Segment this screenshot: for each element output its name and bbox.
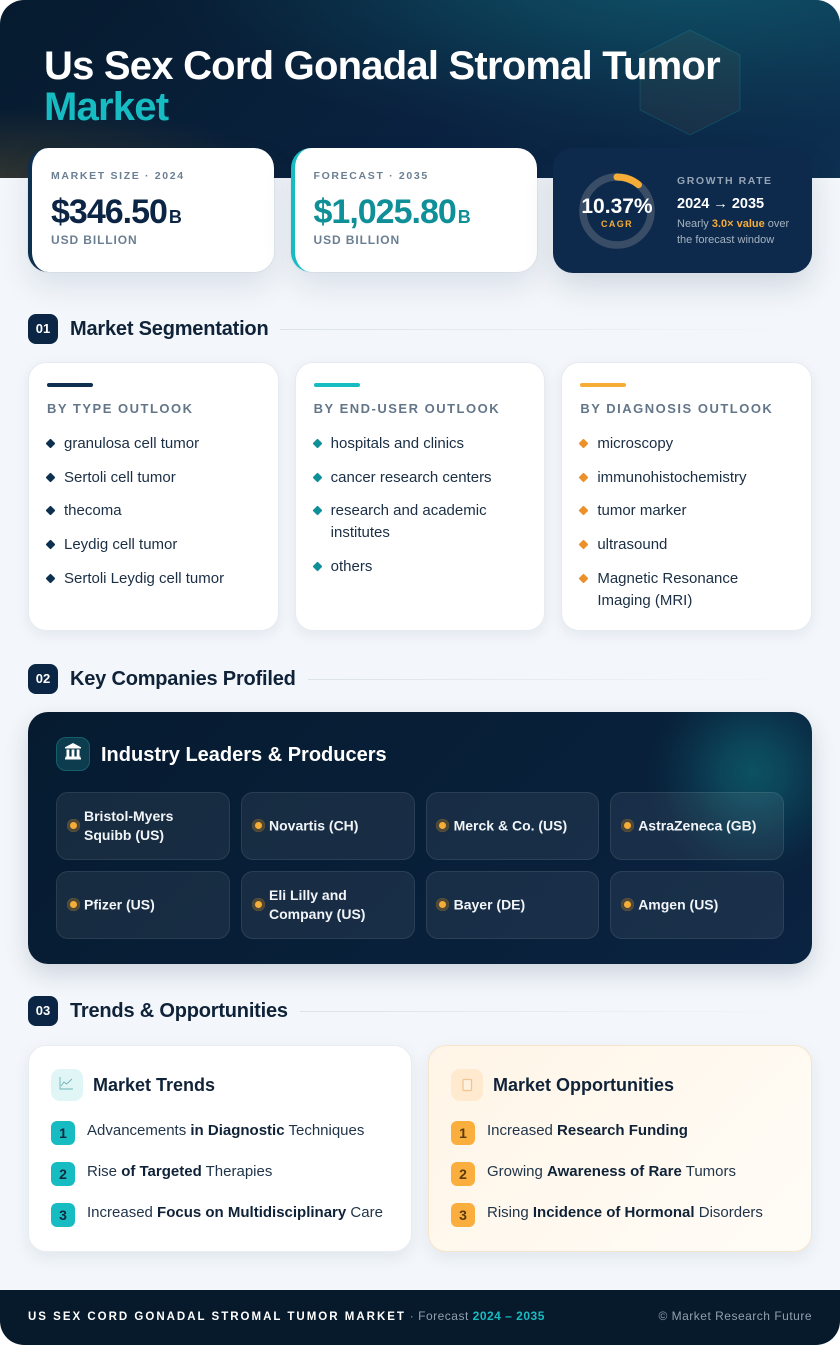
opportunity 3	[451, 1203, 763, 1227]
opportunity 2	[451, 1162, 736, 1186]
growth rate label: GROWTH RATE	[677, 175, 773, 187]
panel: by diagnosis outlook: ultrasound	[597, 536, 667, 553]
company: Bristol-Myers Squibb: Squibb (US)	[84, 827, 164, 843]
company: Bayer: Bayer (DE)	[454, 896, 525, 912]
growth note: the forecast window	[677, 234, 774, 246]
company: Bristol-Myers Squibb	[56, 792, 230, 860]
footer	[0, 1290, 840, 1345]
company: Merck: Merck & Co. (US)	[454, 818, 567, 834]
company: Novartis: Novartis (CH)	[269, 818, 358, 834]
panel: market trends: Advancements in Diagnostic Techniques	[87, 1122, 364, 1139]
stat card: forecast 2035: FORECAST · 2035	[314, 170, 429, 182]
company: Eli Lilly: Company (US)	[269, 906, 365, 922]
panel: by type outlook: Leydig cell tumor	[64, 536, 177, 553]
section heading: trends and opportunities	[28, 996, 640, 1026]
trend 1	[51, 1121, 364, 1145]
stat card: market size 2024: MARKET SIZE · 2024	[51, 170, 185, 182]
section heading: key companies	[28, 664, 644, 694]
company: Amgen	[610, 871, 784, 939]
panel: market opportunities	[428, 1045, 812, 1252]
panel heading: Market Opportunities	[493, 1075, 674, 1095]
panel: by end-user outlook: hospitals and clinics	[331, 435, 464, 452]
section heading: market segmentation: Market Segmentation	[70, 318, 268, 340]
trend 3	[51, 1203, 383, 1227]
panel: by end-user outlook: others	[331, 558, 372, 575]
CAGR value: 10.37%	[581, 195, 653, 218]
company: Amgen: Amgen (US)	[638, 896, 718, 912]
title	[44, 44, 720, 129]
company: Bayer	[426, 871, 599, 939]
company: Eli Lilly: Eli Lilly and	[269, 887, 347, 903]
company: Novartis	[241, 792, 414, 860]
stat card: forecast 2035: USD BILLION	[314, 233, 400, 247]
title: Us Sex Cord Gonadal Stromal Tumor	[44, 44, 720, 88]
stat card: CAGR growth rate	[553, 148, 812, 273]
panel: by end-user outlook: institutes	[331, 524, 390, 541]
panel: market opportunities: Rising Incidence of Hormonal Disorders	[487, 1204, 763, 1221]
header band	[0, 0, 840, 178]
title: Market	[44, 85, 168, 129]
panel: market opportunities: 2	[459, 1166, 467, 1182]
section heading: trends and opportunities: Trends & Opportunities	[70, 1000, 288, 1022]
panel: market opportunities: Increased Research Funding	[487, 1122, 688, 1139]
section heading: market segmentation: 01	[36, 321, 50, 336]
panel: market trends: Rise of Targeted Therapies	[87, 1163, 272, 1180]
footer title: US SEX CORD GONADAL STROMAL TUMOR MARKET · Forecast 2024 – 2035	[28, 1309, 545, 1323]
footer credit: © Market Research Future	[658, 1309, 812, 1323]
panel: market opportunities: 3	[459, 1207, 467, 1223]
stat card: forecast 2035: $1,025.80B	[314, 193, 471, 231]
section heading: market segmentation	[28, 314, 632, 344]
company: Eli Lilly	[241, 871, 414, 939]
panel: by type outlook: BY TYPE OUTLOOK	[47, 401, 194, 416]
company: Pfizer: Pfizer (US)	[84, 896, 155, 912]
panel: market trends: 2	[59, 1166, 67, 1182]
panel: market opportunities: 1	[459, 1125, 467, 1141]
panel: market trends: Increased Focus on Multidisciplinary Care	[87, 1204, 383, 1221]
growth note: Nearly 3.0× value over	[677, 218, 789, 230]
panel: by end-user outlook	[295, 362, 545, 631]
company: AstraZeneca	[610, 792, 784, 860]
panel: by type outlook: Sertoli Leydig cell tumor	[64, 570, 224, 587]
icon: classical building	[56, 737, 90, 771]
trend 2	[51, 1162, 272, 1186]
panel: by end-user outlook: research and academic	[331, 502, 487, 519]
company: Bristol-Myers Squibb: Bristol-Myers	[84, 808, 173, 824]
panel: by diagnosis outlook	[561, 362, 812, 631]
icon: missing glyph box	[451, 1069, 483, 1101]
icon: CAGR progress ring	[579, 173, 655, 249]
growth note	[677, 218, 789, 246]
company: Pfizer	[56, 871, 230, 939]
stat card: market size 2024	[28, 148, 274, 272]
panel: industry leaders	[28, 712, 812, 964]
panel: by diagnosis outlook: BY DIAGNOSIS OUTLOOK	[580, 401, 773, 416]
stat card: market size 2024: USD BILLION	[51, 233, 138, 247]
panel: by end-user outlook: BY END-USER OUTLOOK	[314, 401, 500, 416]
panel: by diagnosis outlook: Imaging (MRI)	[597, 592, 692, 609]
panel: market trends: 3	[59, 1207, 67, 1223]
panel: by diagnosis outlook: microscopy	[597, 435, 673, 452]
stat card: market size 2024: $346.50B	[51, 193, 182, 231]
company: AstraZeneca: AstraZeneca (GB)	[638, 818, 756, 834]
company: Merck	[426, 792, 599, 860]
panel: by diagnosis outlook: tumor marker	[597, 502, 687, 519]
panel heading: Market Trends	[93, 1075, 215, 1095]
stat card: forecast 2035	[290, 148, 536, 272]
section heading: trends and opportunities: 03	[36, 1003, 50, 1018]
panel: by type outlook: granulosa cell tumor	[64, 435, 199, 452]
opportunity 1	[451, 1121, 688, 1145]
icon: line chart	[51, 1069, 83, 1101]
panel heading: Industry Leaders & Producers	[101, 744, 387, 766]
panel: market trends	[28, 1045, 412, 1252]
panel: by type outlook: Sertoli cell tumor	[64, 469, 176, 486]
growth period: 2024 → 2035	[677, 196, 764, 212]
panel: by diagnosis outlook: Magnetic Resonance	[597, 570, 738, 587]
panel: by type outlook: thecoma	[64, 502, 122, 519]
panel: market trends: 1	[59, 1125, 67, 1141]
section heading: key companies: Key Companies Profiled	[70, 668, 296, 690]
panel: by type outlook	[28, 362, 279, 631]
panel: market opportunities: Growing Awareness of Rare Tumors	[487, 1163, 736, 1180]
section heading: key companies: 02	[36, 671, 50, 686]
panel: by diagnosis outlook: immunohistochemistry	[597, 469, 747, 486]
CAGR label: CAGR	[601, 219, 633, 229]
panel: by end-user outlook: cancer research centers	[331, 469, 492, 486]
decorative hexagon	[640, 30, 740, 136]
